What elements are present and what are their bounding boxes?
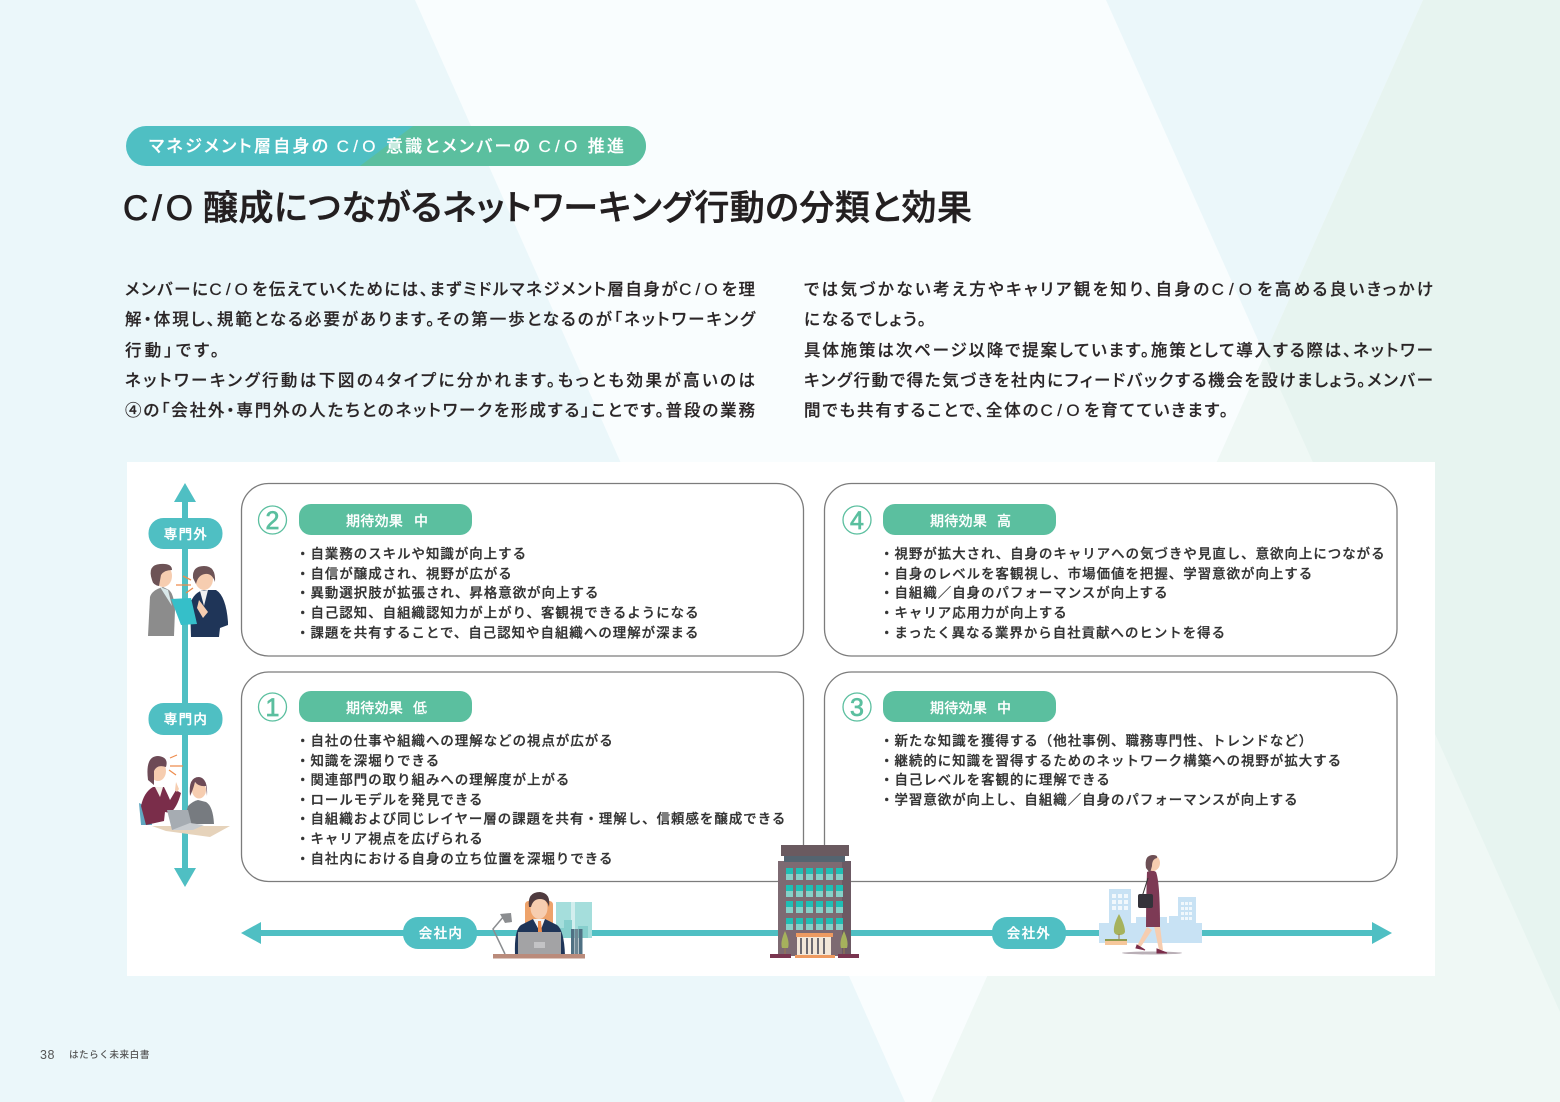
axis label: outside company: 会社外	[1007, 925, 1051, 941]
horizontal axis arrow	[241, 922, 1392, 944]
icon: man at desk with laptop	[493, 892, 592, 958]
effect list: ・自組織／自身のパフォーマンスが向上する	[880, 584, 1169, 600]
icon: businesswoman walking past city	[1099, 855, 1202, 954]
number badge 1	[258, 693, 286, 722]
effect label: medium	[299, 504, 472, 535]
effect list: ・ロールモデルを発見できる	[296, 792, 483, 808]
number badge 2: 2	[266, 507, 279, 535]
panel: network matrix	[127, 462, 1435, 976]
text block: intro right column: では気づかない考え方やキャリア観を知り、自身のC/Oを高める良いきっかけ	[804, 280, 1433, 299]
effect label: high	[883, 504, 1056, 535]
effect label: medium: 期待効果	[346, 513, 403, 529]
section tag: マネジメント層自身の C/O 意識とメンバーの C/O 推進	[149, 132, 624, 157]
effect list: ・まったく異なる業界から自社貢献へのヒントを得る	[880, 626, 1226, 640]
effect label: high: 期待効果	[930, 513, 987, 529]
title: 醸成につながるネットワーキング行動の分類と効果	[203, 180, 972, 231]
effect list: ・課題を共有することで、自己認知や自組織への理解が深まる	[296, 624, 699, 640]
text block: intro left column: ④の「会社外・専門外の人たちとのネットワークを形成する」ことです。普段の業務	[125, 401, 756, 420]
title: C/O	[123, 189, 193, 228]
text block: intro right column: 間でも共有することで、全体のC/Oを育てていきます。	[804, 401, 1228, 420]
effect list: ・学習意欲が向上し、自組織／自身のパフォーマンスが向上する	[880, 792, 1299, 808]
axis label: inside company: 会社内	[419, 926, 463, 941]
card: type 2	[242, 484, 804, 656]
text block: intro right column	[804, 280, 1433, 420]
effect list: ・継続的に知識を習得するためのネットワーク構築への視野が拡大する	[880, 752, 1342, 768]
effect label: low: 低	[413, 700, 427, 716]
axis label: outside company	[992, 917, 1066, 949]
icon: two businessmen talking	[148, 564, 228, 637]
number badge 2	[258, 506, 286, 535]
text block: intro left column: 解・体現し、規範となる必要があります。その第一歩となるのが「ネットワーキング	[125, 309, 756, 329]
number badge 3: 3	[850, 694, 864, 722]
effect list: ・自社内における自身の立ち位置を深堀りできる	[296, 852, 613, 866]
effect label: low: 期待効果	[346, 700, 403, 716]
effect list: ・自信が醸成され、視野が広がる	[296, 566, 513, 582]
text block: intro left column	[125, 279, 756, 420]
effect list: ・異動選択肢が拡張され、昇格意欲が向上する	[296, 584, 599, 600]
number badge 4	[843, 506, 871, 535]
icon: office building	[770, 845, 859, 958]
effect list: ・自己認知、自組織認知力が上がり、客観視できるようになる	[296, 604, 700, 620]
number badge 3	[843, 693, 871, 722]
axis label: within specialty: 専門内	[164, 712, 208, 727]
card: type 3	[824, 672, 1397, 882]
effect list: ・自己レベルを客観的に理解できる	[880, 772, 1111, 788]
number badge 1: 1	[266, 694, 279, 722]
text block: intro right column: になるでしょう。	[804, 310, 926, 329]
effect label: medium	[883, 691, 1056, 722]
effect label: medium: 中	[414, 513, 428, 529]
text block: intro left column: メンバーにC/Oを伝えていくためには、まずミドルマネジメント層自身がC/Oを理	[125, 279, 755, 299]
axis label: outside specialty: 専門外	[164, 526, 208, 542]
footer	[40, 1048, 150, 1062]
text block: intro left column: ネットワーキング行動は下図の4タイプに分かれます。もっとも効果が高いのは	[125, 370, 755, 390]
section tag	[126, 126, 646, 166]
axis label: within specialty	[148, 703, 222, 735]
footer: はたらく未来白書	[69, 1049, 150, 1061]
effect list: ・自社の仕事や組織への理解などの視点が広がる	[296, 732, 614, 748]
axis label: outside specialty	[148, 518, 222, 549]
effect list: ・新たな知識を獲得する（他社事例、職務専門性、トレンドなど）	[880, 732, 1313, 748]
effect list: ・キャリア視点を広げられる	[296, 832, 484, 846]
effect list: ・自業務のスキルや知識が向上する	[296, 546, 527, 562]
vertical axis arrow	[174, 483, 196, 887]
effect list	[296, 546, 700, 640]
effect list: ・キャリア応用力が向上する	[880, 604, 1068, 620]
effect list: ・知識を深堀りできる	[296, 752, 440, 768]
effect list: ・自組織および同じレイヤー層の課題を共有・理解し、信頼感を醸成できる	[296, 810, 786, 826]
effect label: medium: 中	[997, 700, 1011, 716]
effect label: high: 高	[997, 513, 1011, 529]
text block: intro left column: 行動」です。	[125, 341, 219, 360]
text block: intro right column: 具体施策は次ページ以降で提案しています。施策として導入する際は、ネットワー	[804, 341, 1433, 360]
effect label: low	[299, 691, 472, 722]
card: type 4	[824, 484, 1397, 656]
effect list	[296, 732, 786, 866]
effect list: ・関連部門の取り組みへの理解度が上がる	[296, 772, 570, 788]
icon: two businesswomen at a desk	[139, 755, 230, 837]
effect label: medium: 期待効果	[930, 700, 987, 716]
text block: intro right column: キング行動で得た気づきを社内にフィードバックする機会を設けましょう。メンバー	[804, 371, 1433, 390]
effect list: ・視野が拡大され、自身のキャリアへの気づきや見直し、意欲向上につながる	[880, 546, 1386, 562]
card: type 1	[242, 672, 804, 882]
effect list: ・自身のレベルを客観視し、市場価値を把握、学習意欲が向上する	[880, 566, 1313, 582]
effect list	[880, 732, 1342, 808]
effect list	[880, 546, 1386, 640]
number badge 4: 4	[850, 507, 864, 535]
footer: 38	[40, 1048, 55, 1062]
axis label: inside company	[403, 917, 477, 949]
